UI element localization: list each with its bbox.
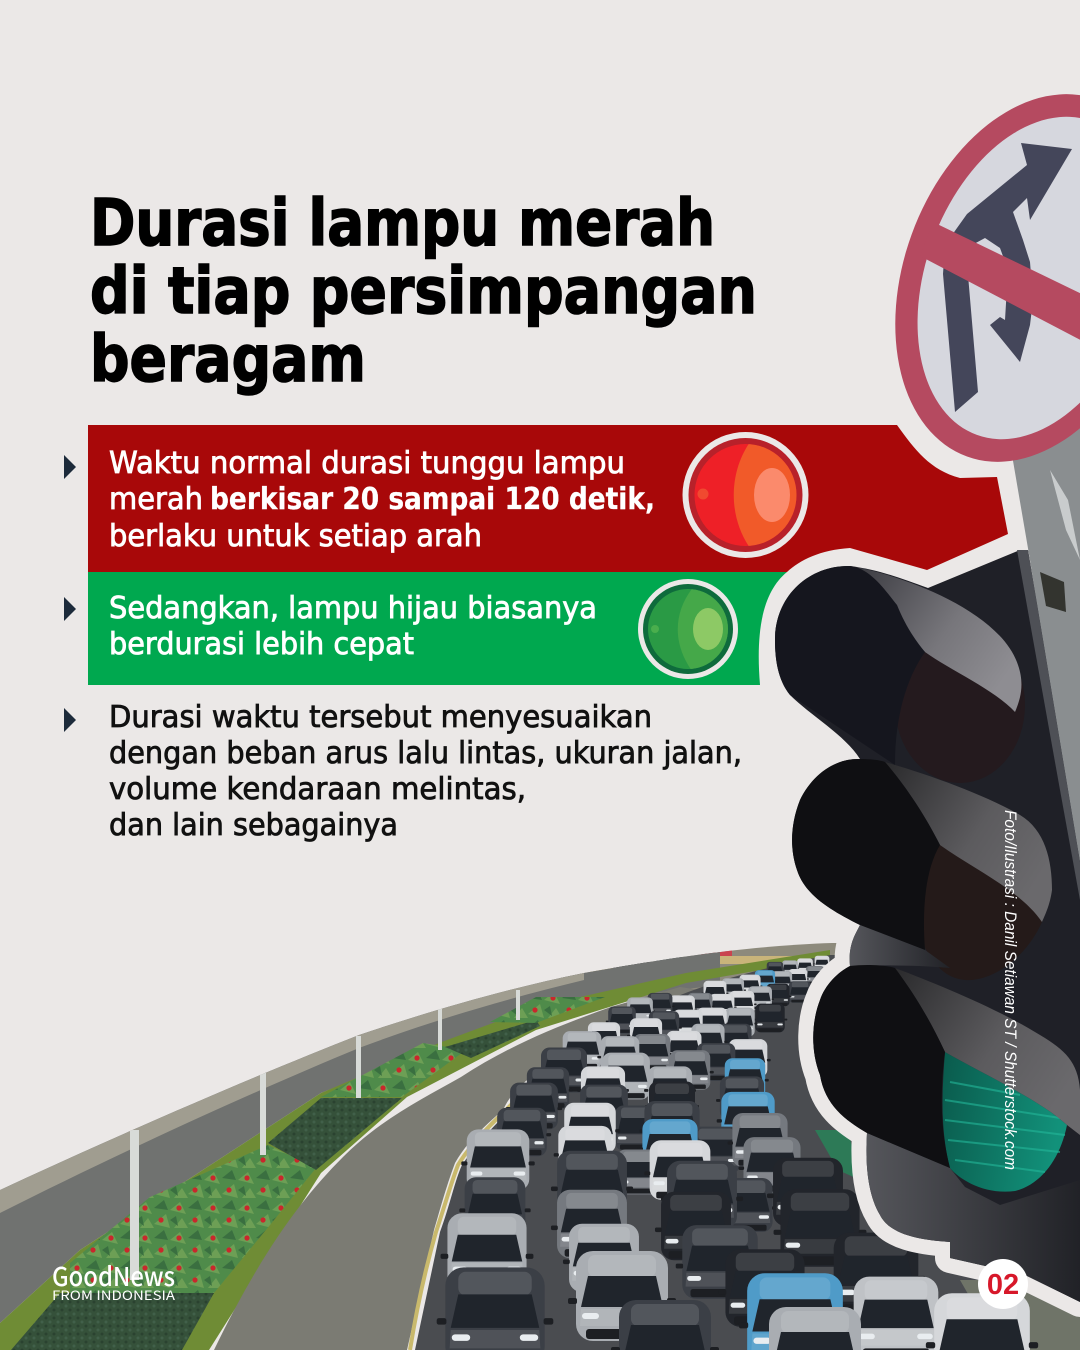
- bullet 1 text: berlaku untuk setiap arah: [109, 519, 482, 554]
- bullet 3 text: Durasi waktu tersebut menyesuaikan: [109, 700, 652, 735]
- logo: FROM INDONESIA: [52, 1285, 175, 1304]
- credit: Foto/Ilustrasi : Danil Setiawan ST / Shutterstock.com: [1001, 810, 1020, 1170]
- main road asphalt: [415, 955, 978, 1350]
- sign rim: [847, 56, 1080, 500]
- traffic light halo: [775, 550, 1080, 1302]
- bullet 3 text: volume kendaraan melintas,: [109, 772, 526, 807]
- bullet 3 text: dan lain sebagainya: [109, 808, 398, 843]
- lower shield of bottom lamp: [866, 1133, 1080, 1302]
- bullet 3 text: dengan beban arus lalu lintas, ukuran jalan,: [109, 736, 742, 771]
- middle hood: [885, 762, 1052, 922]
- bullet 2 text: [109, 591, 597, 662]
- middle lower shield: [850, 925, 950, 968]
- bullet 1 text: Waktu normal durasi tunggu lampu: [109, 446, 625, 481]
- top hood opening: [775, 566, 925, 765]
- housing: [775, 550, 1080, 1302]
- title: beragam: [90, 323, 366, 397]
- page number: 02: [987, 1269, 1019, 1301]
- middle hood opening: [792, 759, 940, 950]
- bottom hood opening: [813, 965, 950, 1168]
- middle lamp lens: [920, 845, 1050, 980]
- median grass: [0, 950, 830, 1350]
- no-turn sign: [895, 94, 1080, 462]
- pavement corner: [960, 1280, 1080, 1350]
- green panel: [88, 572, 787, 685]
- housing side band: [1017, 550, 1080, 900]
- far background: [560, 943, 836, 998]
- bike lane corner: [815, 1130, 853, 1177]
- photo: road with traffic jam: [0, 930, 1080, 1350]
- bullet 3 text: [109, 700, 742, 843]
- light poles: [130, 990, 520, 1280]
- bullet 1 text: [109, 446, 655, 554]
- cars far to near: [437, 956, 1038, 1350]
- flower bed middle: [321, 1043, 466, 1097]
- bullet 2 text: berdurasi lebih cepat: [109, 627, 414, 662]
- sign face: [875, 84, 1080, 472]
- logo: GoodNews: [52, 1257, 175, 1294]
- bottom hood: [895, 968, 1080, 1135]
- bullet 1 text: berkisar 20 sampai 120 detik,: [210, 482, 655, 517]
- top lamp lens: [895, 627, 1025, 783]
- prohibition bar: [926, 225, 1080, 340]
- top hood highlight: [855, 567, 1021, 712]
- icon: red lamp: [682, 430, 810, 560]
- far parked cars: [590, 950, 792, 972]
- service lane: [214, 987, 700, 1350]
- bullet arrow 1: [64, 455, 76, 479]
- title: di tiap persimpangan: [90, 255, 757, 329]
- turn arrow: [943, 143, 1072, 412]
- title: [90, 187, 757, 397]
- flower bed far: [490, 997, 605, 1023]
- hedge far: [445, 1020, 540, 1058]
- bullet arrow 2: [64, 597, 76, 621]
- bullet 2 text: Sedangkan, lampu hijau biasanya: [109, 591, 597, 626]
- bullet arrow 3: [64, 708, 76, 732]
- hedge middle: [268, 1098, 402, 1170]
- hedge near: [11, 1293, 214, 1350]
- concrete barrier: [0, 973, 584, 1213]
- icon: green lamp: [638, 579, 738, 679]
- bottom lamp lens green: [943, 1052, 1067, 1192]
- page number: [978, 1259, 1028, 1309]
- sign pole: [1012, 400, 1080, 880]
- traffic light: [775, 550, 1080, 1302]
- bullet 1 text: merah: [109, 482, 203, 517]
- flower bed near: [70, 1145, 316, 1293]
- barrier and left road: [0, 950, 720, 1323]
- lens stripes: [945, 1082, 1065, 1172]
- title: Durasi lampu merah: [90, 187, 715, 261]
- red panel: [88, 425, 1008, 572]
- yellow curb: [408, 1103, 510, 1350]
